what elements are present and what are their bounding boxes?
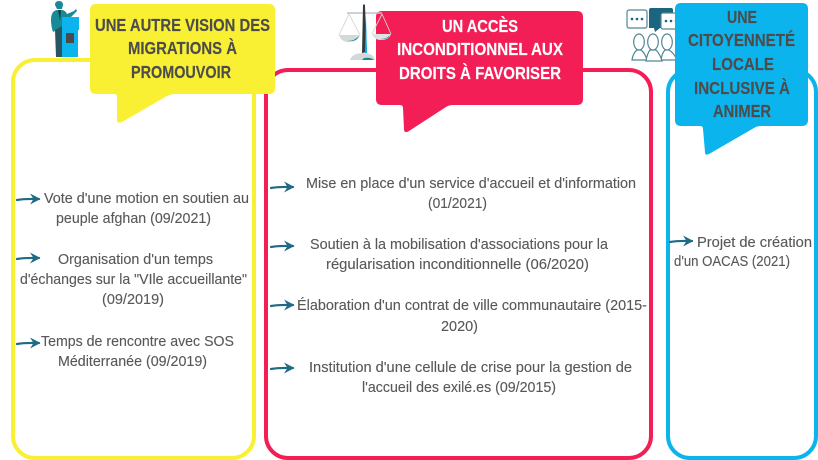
callout: red heading: INCONDITIONNEL AUX <box>397 39 563 59</box>
callout: blue heading: CITOYENNETÉ <box>688 29 795 50</box>
text block: red item 3 <box>271 297 647 335</box>
text block: blue item 1: Projet de création <box>697 235 812 251</box>
icon: scales of justice <box>339 4 391 60</box>
text block: red item 2 <box>271 237 609 273</box>
text block: yellow item 2 <box>17 252 247 308</box>
callout: blue heading <box>675 3 808 155</box>
icon: speaker at podium <box>51 1 79 57</box>
text block: red item 1: Mise en place d'un service d'accueil et d'information <box>306 176 636 192</box>
text block: yellow item 1 <box>17 191 249 227</box>
text block: red item 2: régularisation inconditionnelle (06/2020) <box>326 257 589 273</box>
callout: red heading: UN ACCÈS <box>442 15 518 36</box>
callout: blue heading: LOCALE <box>712 54 774 74</box>
text block: red item 3: Élaboration d'un contrat de ville communautaire (2015- <box>297 297 647 314</box>
text block: yellow item 1: Vote d'une motion en soutien au <box>44 191 249 207</box>
text block: yellow item 3: Méditerranée (09/2019) <box>58 354 207 370</box>
text block: yellow item 3 <box>17 334 234 370</box>
callout: yellow heading: MIGRATIONS À <box>128 37 237 58</box>
text block: red item 1 <box>271 176 636 212</box>
callout: blue heading: UNE <box>727 7 757 27</box>
callout: yellow heading: PROMOUVOIR <box>131 62 231 82</box>
text block: red item 4 <box>271 360 632 396</box>
text block: yellow item 2: (09/2019) <box>102 292 164 308</box>
text block: red item 4: Institution d'une cellule de crise pour la gestion de <box>309 360 632 376</box>
callout: red heading <box>376 11 583 132</box>
icon: group with chat bubbles <box>627 8 681 61</box>
callout: blue heading: INCLUSIVE À <box>694 77 790 98</box>
panel: red frame <box>266 70 651 458</box>
text block: red item 1: (01/2021) <box>428 196 487 212</box>
text block: blue item 1 <box>670 235 812 270</box>
text block: red item 4: l'accueil des exilé.es (09/2015) <box>362 380 556 396</box>
panel: blue frame <box>668 70 816 458</box>
text block: red item 2: Soutien à la mobilisation d'associations pour la <box>310 237 609 253</box>
callout: yellow heading <box>90 4 275 123</box>
callout: yellow heading: UNE AUTRE VISION DES <box>95 15 270 35</box>
callout: blue heading: ANIMER <box>713 101 771 121</box>
text block: blue item 1: d'un OACAS (2021) <box>674 254 790 270</box>
text block: yellow item 3: Temps de rencontre avec SOS <box>41 334 234 350</box>
text block: red item 3: 2020) <box>441 319 478 335</box>
text block: yellow item 2: Organisation d'un temps <box>58 252 213 268</box>
panel: yellow frame <box>13 60 254 458</box>
text block: yellow item 1: peuple afghan (09/2021) <box>56 211 211 227</box>
callout: red heading: DROITS À FAVORISER <box>399 62 561 83</box>
text block: yellow item 2: d'échanges sur la "VIle accueillante" <box>20 272 247 288</box>
